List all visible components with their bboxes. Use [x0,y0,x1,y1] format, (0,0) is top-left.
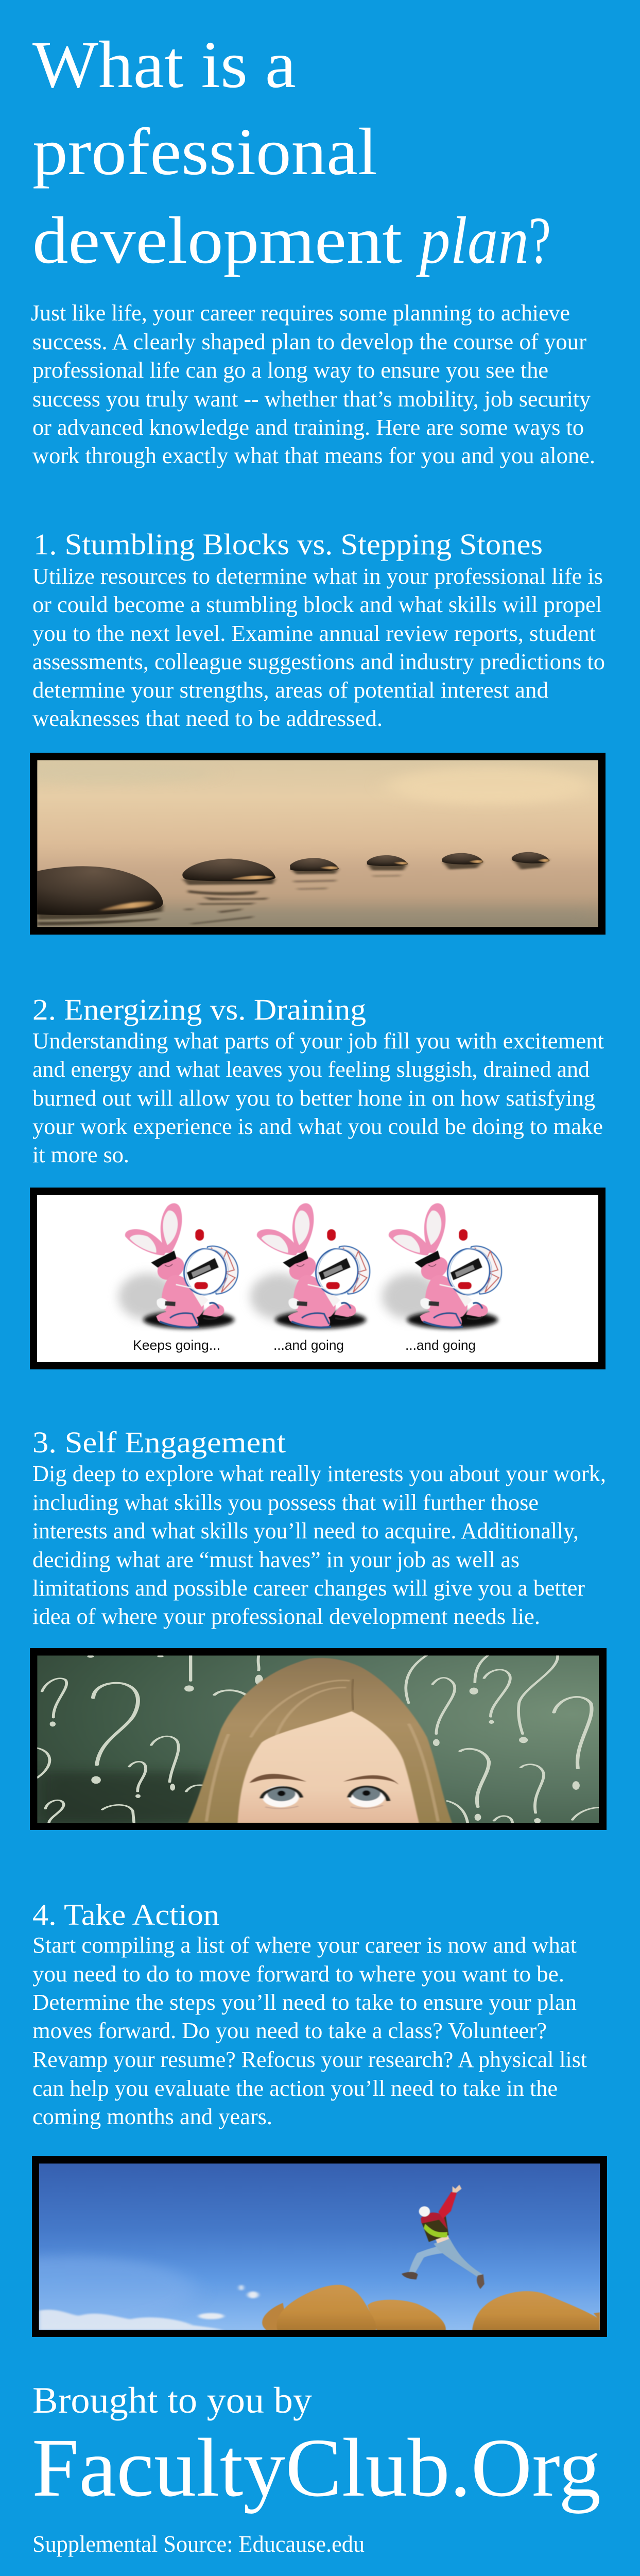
text block: section 3: idea of where your professional development needs lie. [32,1604,540,1629]
intro text block: professional life can go a long way to ensure you see the [32,358,548,383]
heading: section 3: 3. Self Engagement [32,1426,286,1459]
text block: section 3: including what skills you possess that will further those [32,1490,539,1515]
credit: FacultyClub.Org logotype: FacultyClub.Org [32,2422,601,2514]
bunny 2 with caption: ...and going [273,1337,344,1353]
text block: section 4: Determine the steps you’ll need to take to ensure your plan [32,1990,577,2015]
intro text block [31,300,595,468]
text block: section 2: your work experience is and what you could be doing to make [32,1114,603,1139]
bunny 1 with caption [118,1203,238,1353]
text block: section 3: limitations and possible career changes will give you a better [32,1575,585,1601]
photo: woman looking up at question marks on a chalkboard [30,1648,607,1830]
text block: section 1 [32,564,605,731]
text block: section 1: Utilize resources to determine what in your professional life is [32,564,603,589]
text block: section 3 [32,1461,606,1629]
credit: brought to you by: Brought to you by [32,2380,312,2421]
intro text block: success you truly want -- whether that’s mobility, job security [32,386,591,412]
source note: Supplemental Source: Educause.edu [32,2531,365,2557]
intro text block: success. A clearly shaped plan to develop the course of your [32,329,586,354]
text block: section 3: deciding what are “must haves” in your job as well as [32,1547,520,1572]
intro text block: work through exactly what that means for you and you alone. [32,443,595,468]
text block: section 2 [32,1028,604,1167]
text block: section 4 [32,1933,587,2129]
text block: section 2: Understanding what parts of your job fill you with excitement [32,1028,604,1054]
text block: section 1: you to the next level. Examine annual review reports, student [32,621,596,646]
bunny 2 with caption [250,1203,370,1353]
text block: section 2: burned out will allow you to better hone in on how satisfying [32,1086,595,1111]
intro text block: or advanced knowledge and training. Here are some ways to [32,415,584,440]
heading: section 2: 2. Energizing vs. Draining [32,993,366,1026]
title: professional [32,115,377,189]
heading: section 1: 1. Stumbling Blocks vs. Stepping Stones [33,528,543,561]
text block: section 1: assessments, colleague suggestions and industry predictions to [32,649,605,674]
text block: section 4: moves forward. Do you need to take a class? Volunteer? [32,2018,547,2043]
text block: section 4: coming months and years. [32,2104,272,2129]
text block: section 1: determine your strengths, areas of potential interest and [32,677,548,703]
text block: section 4: you need to do to move forward to where you want to be. [32,1961,564,1987]
text block: section 4: Revamp your resume? Refocus your research? A physical list [32,2047,587,2072]
text block: section 2: it more so. [32,1142,129,1167]
text block: section 3: Dig deep to explore what really interests you about your work, [32,1461,606,1486]
text block: section 3: interests and what skills you’ll need to acquire. Additionally, [32,1518,579,1544]
text block: section 1: or could become a stumbling block and what skills will propel [32,592,602,617]
photo: three drumming bunnies [30,1188,606,1369]
title: What is a [32,28,296,102]
heading: section 4: 4. Take Action [32,1898,219,1931]
title: development [32,204,402,278]
title [32,28,551,278]
text block: section 2: and energy and what leaves you feeling sluggish, drained and [32,1057,590,1082]
photo: person leaping between boulders [0,2156,607,2337]
intro text block: Just like life, your career requires some planning to achieve [31,300,570,326]
title: plan [416,204,529,278]
bunny 3 with caption [382,1203,501,1353]
text block: section 1: weaknesses that need to be addressed. [32,706,383,731]
photo: stepping stones in water [0,753,606,935]
text block: section 4: Start compiling a list of where your career is now and what [32,1933,577,1958]
bunny 3 with caption: ...and going [405,1337,476,1353]
title: ? [529,204,551,278]
text block: section 4: can help you evaluate the action you’ll need to take in the [32,2076,558,2101]
bunny 1 with caption: Keeps going... [133,1337,220,1353]
